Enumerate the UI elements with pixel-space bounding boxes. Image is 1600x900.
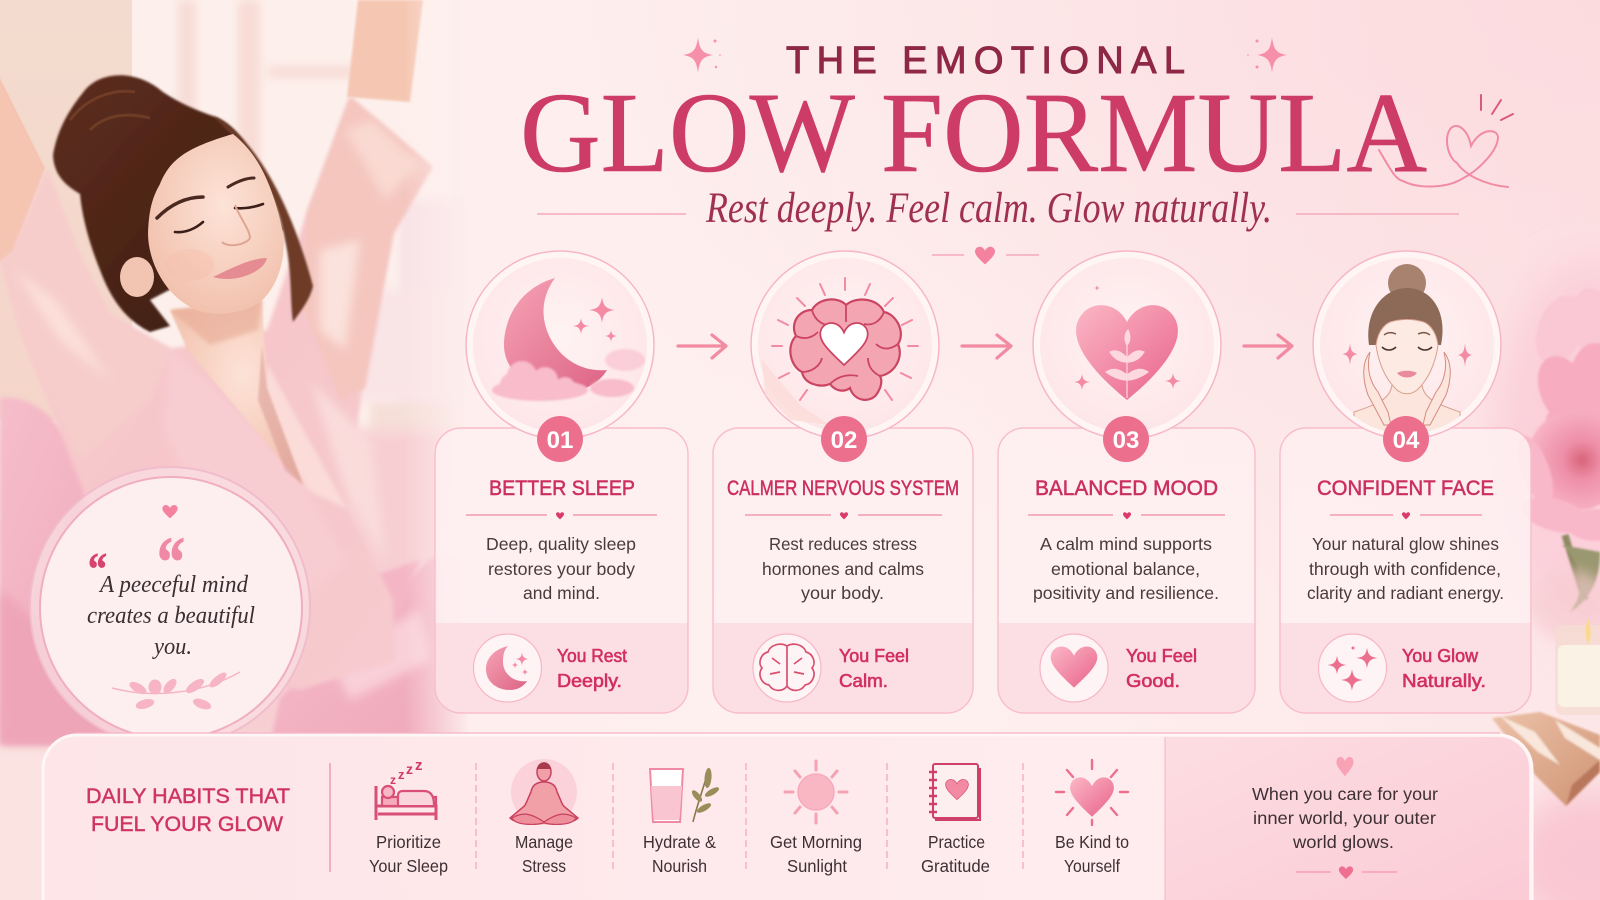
heading: CONFIDENT FACE (1317, 477, 1494, 500)
habit: sleep: Your Sleep (369, 856, 448, 876)
number badge (1103, 416, 1149, 462)
result text: You Rest (557, 646, 627, 666)
quote text (87, 572, 255, 660)
small quote mark: “ (88, 544, 107, 594)
number badge (537, 416, 583, 462)
description: A calm mind supports (1040, 534, 1212, 554)
description: positivity and resilience. (1033, 583, 1219, 603)
habit: sleep: Prioritize (376, 832, 441, 852)
result text: Deeply. (557, 671, 622, 691)
habit: self kindness (1055, 760, 1129, 876)
habit: self kindness: Yourself (1064, 856, 1120, 876)
quote text: you. (152, 634, 192, 660)
habit: sunlight (770, 761, 862, 876)
candle (1555, 618, 1600, 715)
icon: meditating figure (510, 759, 578, 825)
bar heading: DAILY HABITS THAT (86, 785, 290, 808)
bar heading: FUEL YOUR GLOW (91, 813, 283, 836)
description: your body. (801, 583, 884, 603)
icon: bed: z (390, 773, 396, 787)
habit: stress: Manage (515, 832, 573, 852)
divider (466, 512, 657, 519)
result text: Calm. (839, 671, 888, 691)
icon: small moon (474, 634, 542, 702)
closing message panel (1165, 737, 1529, 900)
habit: gratitude: Practice (928, 832, 985, 852)
habit: gratitude: Gratitude (921, 856, 990, 876)
description (1307, 534, 1504, 603)
result text: You Glow (1402, 646, 1479, 666)
card body (998, 428, 1255, 713)
panel: daily habits bar (43, 733, 1532, 900)
description: clarity and radiant energy. (1307, 583, 1504, 603)
peonies (1510, 288, 1600, 612)
moon circle illustration (466, 251, 654, 439)
icon: bed (376, 757, 436, 820)
icon: bed: z (406, 761, 413, 777)
tagline: Rest deeply. Feel calm. Glow naturally. (705, 185, 1272, 232)
description: Rest reduces stress (769, 534, 917, 554)
sparkle right of title (1247, 37, 1287, 73)
result text (1126, 646, 1197, 691)
icon: notebook (929, 764, 980, 820)
tagline rules and heart (537, 214, 1459, 264)
description (762, 534, 924, 603)
bar heading (86, 785, 290, 836)
description: and mind. (523, 583, 600, 603)
habit: hydrate: Hydrate & (643, 832, 716, 852)
quote text: A peeceful mind (98, 572, 249, 598)
habit: sunlight: Get Morning (770, 832, 862, 852)
closing message panel: world glows. (1292, 832, 1394, 852)
heart circle illustration (1033, 251, 1221, 439)
description: Your natural glow shines (1312, 534, 1499, 554)
result text: You Feel (1126, 646, 1197, 666)
pajama top and sleeves (0, 97, 432, 690)
step arrows (678, 335, 1292, 358)
habit: sunlight: Sunlight (787, 856, 847, 876)
divider (1028, 512, 1225, 519)
heading: BALANCED MOOD (1035, 477, 1218, 500)
panel: step 4 confident face (1280, 251, 1531, 713)
number badge: 01 (547, 427, 573, 454)
icon: radiant heart (1056, 760, 1128, 825)
brain circle illustration (751, 251, 939, 439)
photo: woman stretching in bed (0, 0, 463, 900)
divider (1330, 512, 1482, 519)
icon: bed: z (415, 757, 422, 774)
bedding (0, 398, 470, 745)
panel: step 1 better sleep (435, 251, 688, 713)
result text (839, 646, 909, 691)
hair (53, 75, 313, 332)
neck and chest (170, 300, 303, 485)
closing message panel: inner world, your outer (1253, 808, 1436, 828)
face (120, 134, 284, 314)
habit: stress: Stress (522, 856, 566, 876)
description: Deep, quality sleep (486, 534, 636, 554)
sparkle left of title (683, 37, 721, 73)
leaf sprig (112, 671, 240, 711)
habit: hydrate: Nourish (652, 856, 707, 876)
habit: gratitude (921, 764, 990, 876)
closing message panel: When you care for your (1252, 784, 1438, 804)
number badge: 04 (1393, 427, 1420, 454)
title line one: THE EMOTIONAL (786, 40, 1185, 82)
habit: hydrate (643, 768, 720, 876)
number badge: 03 (1113, 427, 1139, 454)
heading: CALMER NERVOUS SYSTEM (727, 477, 959, 500)
result text (557, 646, 627, 691)
result text: You Feel (839, 646, 909, 666)
face circle illustration (1313, 251, 1501, 440)
result text (1402, 646, 1486, 691)
number badge (821, 416, 867, 462)
icon: sun (785, 761, 847, 823)
description: restores your body (488, 559, 635, 579)
panel: step 2 calmer nervous system (713, 251, 973, 713)
habit: sleep (369, 757, 448, 876)
card body (713, 428, 973, 713)
description (1033, 534, 1219, 603)
description: through with confidence, (1309, 559, 1501, 579)
divider (745, 512, 942, 519)
description: hormones and calms (762, 559, 924, 579)
icon: bed: z (398, 767, 405, 782)
number badge (1383, 416, 1429, 462)
flourish heart (1379, 95, 1513, 187)
large quote mark: “ (157, 522, 185, 602)
habit: self kindness: Be Kind to (1055, 832, 1129, 852)
quote text: creates a beautiful (87, 603, 255, 629)
result text: Naturally. (1402, 671, 1486, 691)
description: emotional balance, (1051, 559, 1200, 579)
card body (1280, 428, 1531, 713)
panel: step 3 balanced mood (998, 251, 1255, 713)
habit: stress (510, 759, 578, 876)
result text: Good. (1126, 671, 1180, 691)
description (486, 534, 636, 603)
icon: sparkles (1318, 634, 1386, 702)
number badge: 02 (831, 427, 857, 454)
icon: glass and leaf (650, 768, 720, 822)
panel: quote bubble (30, 467, 310, 747)
icon: small heart (1040, 634, 1108, 702)
small heart (162, 505, 178, 518)
ribbon (1492, 712, 1600, 806)
icon: small brain (753, 634, 821, 702)
flowers, candle and ribbon photo (1492, 260, 1600, 900)
arm skin (0, 0, 423, 262)
title line two: GLOW FORMULA (520, 69, 1427, 196)
card body (435, 428, 688, 713)
heading: BETTER SLEEP (489, 477, 635, 500)
